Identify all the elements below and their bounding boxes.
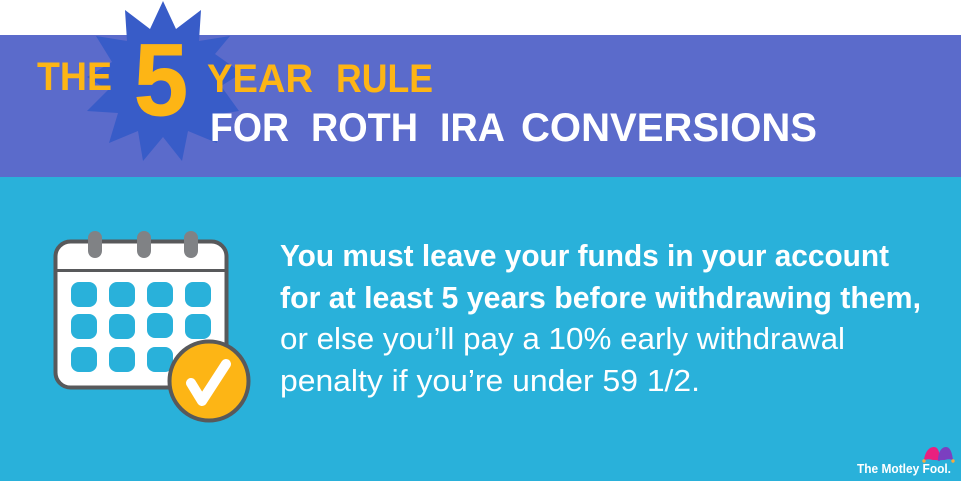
check mark bbox=[191, 364, 226, 401]
title numeral: 5: 5 bbox=[134, 23, 188, 137]
check badge bbox=[170, 342, 248, 420]
title line: FOR ROTH IRA CONVERSIONS bbox=[210, 106, 817, 150]
title line: FOR ROTH IRA CONVERSIONS: IRA bbox=[440, 106, 505, 150]
logo: The Motley Fool bbox=[857, 447, 955, 476]
title words: YEAR RULE: YEAR bbox=[207, 57, 313, 101]
calendar page bbox=[56, 242, 226, 388]
title words: YEAR RULE: RULE bbox=[336, 57, 433, 101]
calendar day cells bbox=[71, 282, 211, 372]
panel: body background bbox=[0, 177, 961, 481]
icon: calendar with check mark bbox=[54, 231, 248, 420]
regular line 3: or else you’ll pay a 10% early withdrawal bbox=[280, 321, 845, 356]
panel: header band bbox=[0, 35, 961, 177]
title word: THE: THE bbox=[37, 55, 112, 99]
title line: FOR ROTH IRA CONVERSIONS: ROTH bbox=[311, 106, 418, 150]
title words: YEAR RULE bbox=[207, 57, 433, 101]
regular line 4: penalty if you’re under 59 1/2. bbox=[280, 363, 700, 398]
title: THE 5 YEAR RULE FOR ROTH IRA CONVERSIONS bbox=[37, 23, 817, 150]
icon: starburst badge bbox=[87, 1, 242, 161]
title line: FOR ROTH IRA CONVERSIONS: CONVERSIONS bbox=[521, 106, 817, 150]
text block: rule explanation bbox=[280, 238, 921, 398]
title line: FOR ROTH IRA CONVERSIONS: FOR bbox=[210, 106, 289, 150]
bold line 2: for at least 5 years before withdrawing them, bbox=[280, 280, 921, 315]
logo icon: jester hat bbox=[922, 447, 955, 463]
bold line 1: You must leave your funds in your account bbox=[280, 238, 889, 273]
calendar rings bbox=[88, 231, 198, 258]
logo wordmark: The Motley Fool. bbox=[857, 461, 951, 476]
calendar header divider bbox=[54, 269, 228, 272]
